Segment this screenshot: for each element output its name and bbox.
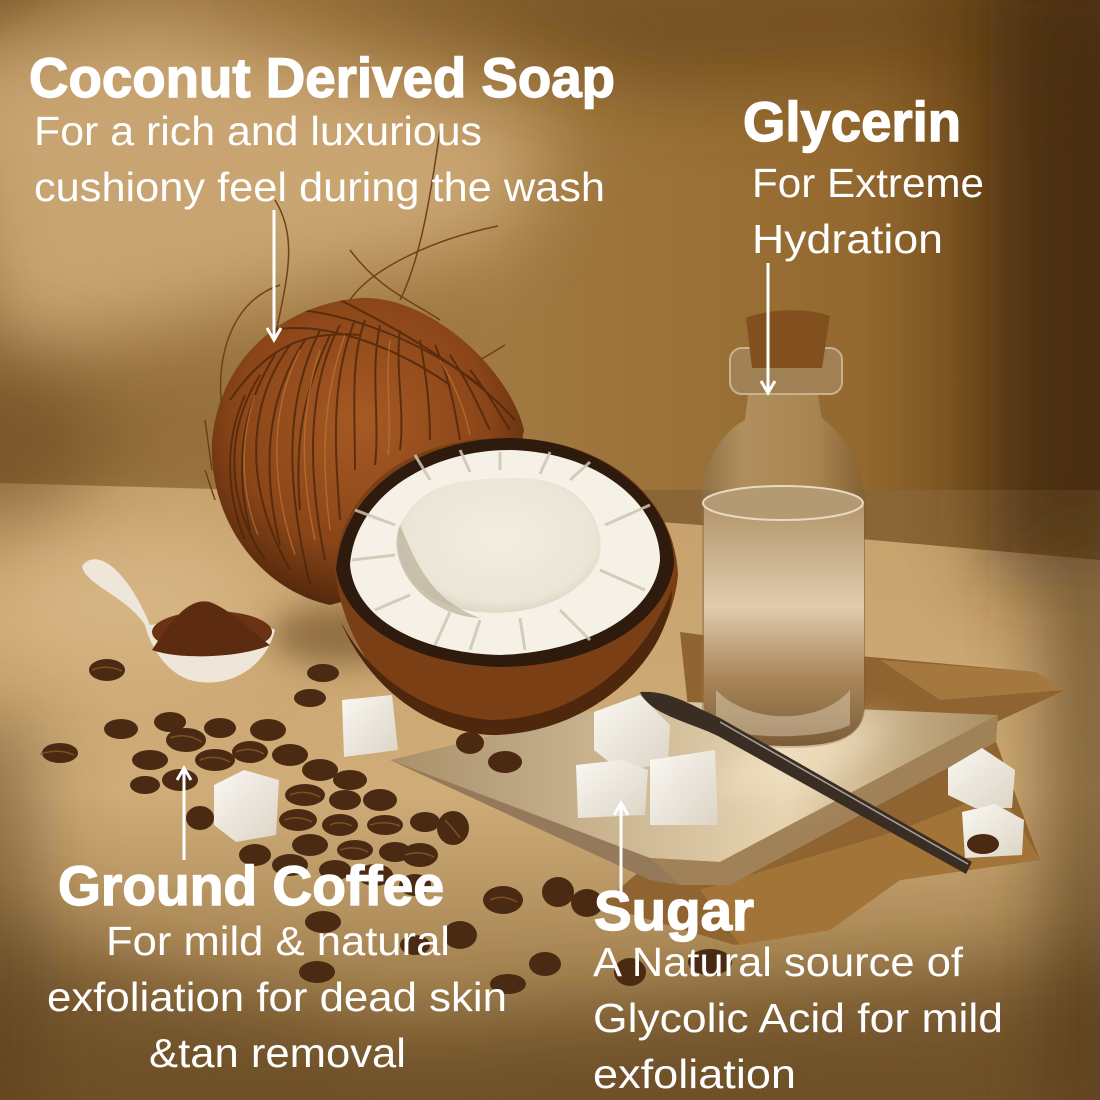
text: glycerin description: Hydration	[752, 216, 943, 262]
sugar cubes	[214, 695, 1024, 858]
text: sugar description: A Natural source of	[593, 939, 964, 985]
text: sugar description: exfoliation	[593, 1051, 796, 1097]
arrow: coconut	[267, 210, 281, 340]
heading: Glycerin: Glycerin	[743, 90, 961, 153]
text: glycerin description	[752, 160, 984, 262]
ceramic spoon with coffee	[82, 559, 275, 683]
text: glycerin description: For Extreme	[752, 160, 984, 206]
whole coconut	[205, 130, 524, 605]
teaspoon	[640, 692, 972, 874]
heading: Ground Coffee: Ground Coffee	[58, 854, 444, 917]
arrow: ground coffee	[177, 768, 191, 860]
heading: Sugar: Sugar	[594, 879, 754, 942]
glycerin bottle	[702, 310, 865, 748]
text: ground coffee description	[47, 918, 507, 1076]
arrow: glycerin	[761, 263, 775, 393]
background table	[0, 483, 1100, 1100]
marble slab	[390, 700, 998, 885]
text: ground coffee description: For mild & natural	[106, 918, 450, 964]
text: coconut description: cushiony feel during the wash	[34, 164, 605, 210]
text: ground coffee description: &tan removal	[149, 1030, 406, 1076]
text: coconut description	[34, 108, 605, 210]
text: ground coffee description: exfoliation for dead skin	[47, 974, 507, 1020]
halved coconut	[335, 438, 678, 735]
arrow: sugar	[614, 803, 628, 895]
heading: Coconut Derived Soap: Coconut Derived Soap	[29, 46, 615, 109]
text: sugar description: Glycolic Acid for mild	[593, 995, 1003, 1041]
burlap cloth	[600, 632, 1065, 945]
coffee bean highlights	[40, 667, 517, 902]
coffee beans	[42, 659, 999, 994]
text: sugar description	[593, 939, 1003, 1097]
background wall	[0, 0, 1100, 490]
text: coconut description: For a rich and luxurious	[34, 108, 482, 154]
